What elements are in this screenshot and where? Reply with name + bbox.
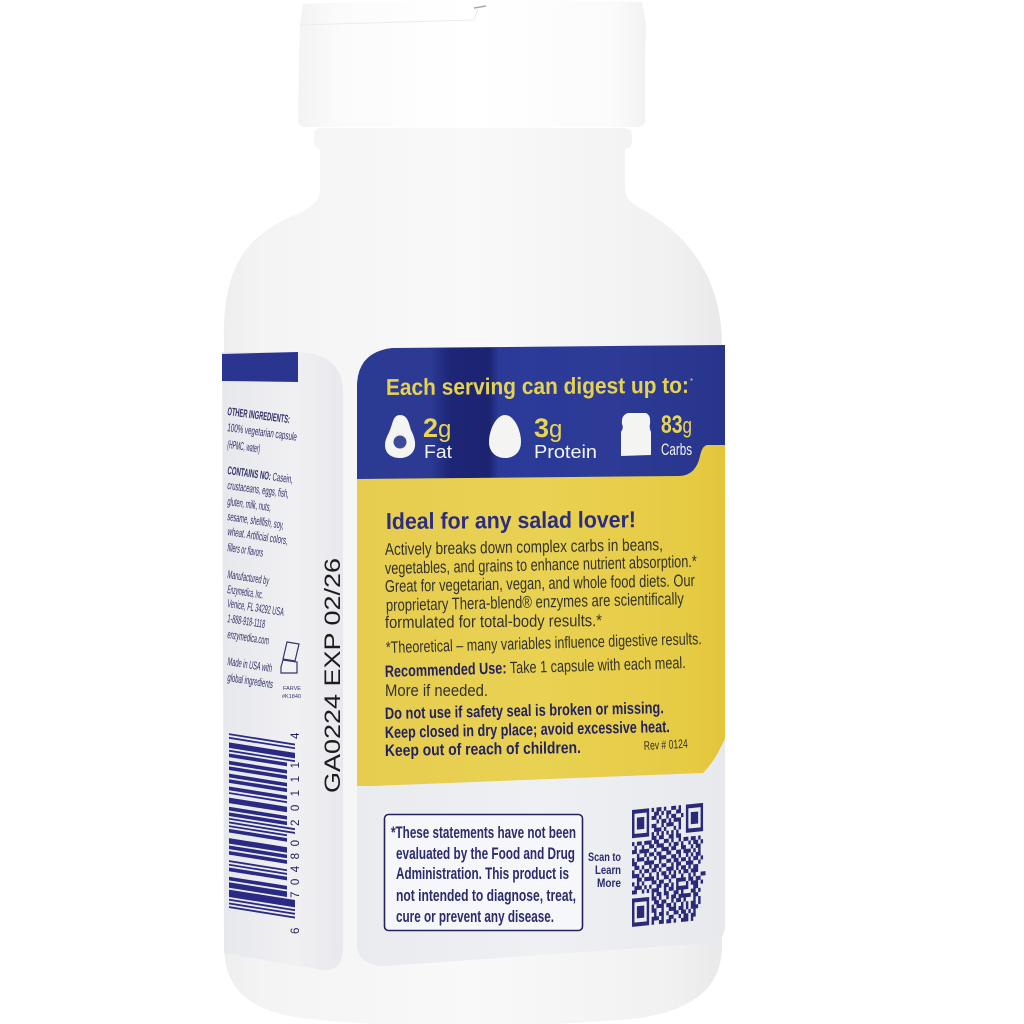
stat: fat: Fat [424, 442, 452, 462]
stat: fat: 2g [423, 413, 451, 443]
white label base [357, 730, 725, 966]
yellow panel background [357, 445, 725, 786]
QR code [632, 803, 706, 927]
stat: protein [489, 413, 597, 462]
text: warnings: Do not use if safety seal is broken or missing. [385, 699, 664, 723]
text: recommended use [385, 654, 686, 700]
text: scan to learn more: Learn [595, 865, 621, 877]
callout: FDA disclaimer [384, 814, 582, 930]
left label background [222, 352, 343, 970]
barcode [229, 732, 302, 934]
callout: FDA disclaimer: evaluated by the Food and Drug [396, 845, 575, 863]
callout: FDA disclaimer: not intended to diagnose, treat, [396, 887, 576, 905]
icon: avocado [385, 415, 415, 458]
text: ingredients and manufacturer: sesame, shellfish, soy, [227, 511, 285, 532]
text: ingredients and manufacturer: wheat. Artificial colors, [226, 526, 289, 548]
text: ingredients and manufacturer: OTHER INGREDIENTS: [227, 406, 291, 426]
text block: description: vegetables, and grains to enhance nutrient absorption.* [385, 552, 697, 578]
stat: carbs: Carbs [661, 441, 692, 459]
icon: FARVE pet-free mark [281, 642, 301, 700]
lot and expiry stamp: GA0224 EXP 02/26 [320, 558, 345, 793]
footnote star: * [690, 377, 693, 386]
text: ingredients and manufacturer: 1-888-918-1118 [227, 613, 266, 631]
blue header background [357, 345, 725, 479]
text: warnings [385, 699, 670, 760]
text: scan to learn more: More [597, 878, 621, 890]
stat: carbs: 83g [661, 411, 692, 439]
text block: description: Great for vegetarian, vegan, and whole food diets. Our [385, 571, 695, 596]
text: recommended use: Recommended Use: Take 1 capsule with each meal. [385, 654, 686, 681]
stat: protein: Protein [534, 442, 597, 462]
callout: FDA disclaimer: cure or prevent any disease. [396, 908, 554, 926]
callout: FDA disclaimer: Administration. This product is [396, 865, 569, 883]
barcode: 70480 [290, 840, 302, 898]
icon: FARVE pet-free mark: FARVE [283, 686, 301, 692]
heading: each serving: Each serving can digest up to: [386, 372, 689, 400]
text: warnings: Keep out of reach of children. [385, 739, 581, 760]
barcode: 4 [290, 732, 302, 739]
callout: FDA disclaimer: *These statements have not been [391, 824, 576, 842]
text: ingredients and manufacturer: 100% vegetarian capsule [227, 422, 298, 444]
text block: description: proprietary Thera-blend® enzymes are scientifically [386, 589, 684, 615]
barcode: 6 [290, 928, 302, 934]
text: ingredients and manufacturer: enzymedica.com [227, 629, 270, 648]
stat: fat [385, 413, 452, 462]
icon: egg [489, 415, 521, 458]
text: ingredients and manufacturer: crustaceans, eggs, fish, [227, 480, 290, 501]
icon: FARVE pet-free mark: #K1840 [282, 694, 301, 700]
text: scan to learn more: Scan to [588, 852, 621, 864]
text: revision: Rev # 0124 [643, 737, 688, 753]
barcode: 20111 [290, 762, 302, 826]
text: ingredients and manufacturer: Enzymedica, Inc. [227, 584, 264, 602]
bottle body [224, 128, 722, 1024]
text block: description: Actively breaks down complex carbs in beans, [385, 535, 663, 559]
text: ingredients and manufacturer: (HPMC, water) [227, 439, 261, 456]
text: ingredients and manufacturer: fillers or flavors [227, 542, 264, 560]
text: theoretical note: *Theoretical – many variables influence digestive results. [386, 630, 702, 657]
stat: carbs [621, 411, 692, 459]
panel: left side label [222, 352, 343, 970]
text: warnings: Keep closed in dry place; avoid excessive heat. [385, 718, 670, 742]
text block: description [385, 535, 697, 632]
text: ingredients and manufacturer [226, 406, 298, 691]
text: ingredients and manufacturer: global ingredients [227, 672, 274, 691]
stat: protein: 3g [534, 413, 562, 443]
text: ingredients and manufacturer: CONTAINS NO: Casein, [227, 465, 294, 486]
panel: right main label [357, 345, 725, 966]
text: ingredients and manufacturer: Manufactured by [227, 569, 270, 588]
left label blue bar [222, 352, 298, 382]
icon: bread slice [621, 413, 651, 456]
heading: ideal for any salad lover: Ideal for any salad lover! [386, 506, 636, 534]
text: ingredients and manufacturer: Made in USA with [227, 656, 273, 675]
text: scan to learn more [588, 852, 621, 890]
bottle cap [298, 1, 646, 127]
text: ingredients and manufacturer: gluten, milk, nuts, [227, 496, 272, 514]
text block: description: formulated for total-body results.* [385, 611, 602, 632]
text: recommended use: More if needed. [385, 682, 488, 700]
text: ingredients and manufacturer: Venice, FL 34292 USA [227, 598, 285, 619]
